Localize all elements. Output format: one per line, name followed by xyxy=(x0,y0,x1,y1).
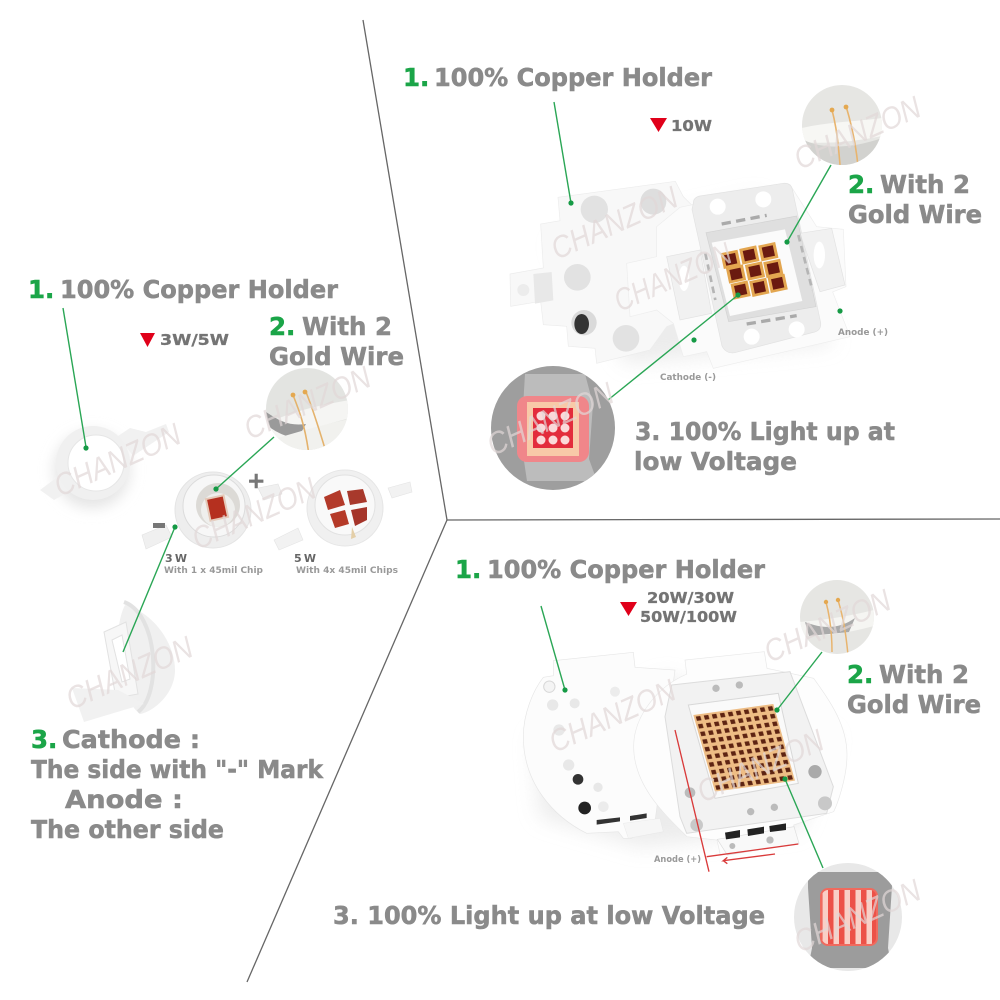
watermarks: CHANZON: CHANZON xyxy=(61,629,199,716)
text: with 2 gold wire: With 2 xyxy=(302,312,392,341)
watermarks: CHANZON: CHANZON xyxy=(187,471,322,556)
icon: 10W module xyxy=(510,181,850,368)
heading: copper holder: 100% Copper Holder xyxy=(487,555,766,584)
panel dividers xyxy=(247,20,1000,982)
text: 3W caption: With 1 x 45mil Chip xyxy=(164,566,264,576)
text: with 2 gold wire: Gold Wire xyxy=(269,342,404,371)
red polarity marks xyxy=(675,730,798,872)
text: with 2 gold wire: 2. xyxy=(847,660,873,689)
heading: copper holder: 100% Copper Holder xyxy=(60,275,339,304)
watermarks: CHANZON: CHANZON xyxy=(609,235,737,318)
heading: copper holder: 100% Copper Holder xyxy=(434,63,713,92)
front plate xyxy=(634,652,847,855)
chip array xyxy=(693,704,795,792)
text: cathode and anode notes: 3. xyxy=(31,725,57,754)
text: with 2 gold wire: 2. xyxy=(848,170,874,199)
watermarks: CHANZON: CHANZON xyxy=(789,872,927,959)
text: cathode and anode notes: The side with "-" Mark xyxy=(31,755,324,784)
watermarks: CHANZON: CHANZON xyxy=(789,89,927,176)
heading: copper holder: 1. xyxy=(403,63,429,92)
label: 20W to 100W xyxy=(620,589,737,626)
icon: lit red chip magnifier xyxy=(794,863,902,971)
icon: LED side view xyxy=(72,602,175,722)
watermarks: CHANZON xyxy=(49,89,927,959)
text: 3W caption xyxy=(164,552,264,576)
leader lines xyxy=(63,308,274,652)
icon: LED back view xyxy=(40,424,169,508)
text: light up at low voltage: 3. 100% Light up at low Voltage xyxy=(333,901,765,930)
icon: gold wire magnifier xyxy=(800,580,874,654)
text: with 2 gold wire xyxy=(848,170,982,229)
leader lines xyxy=(541,606,823,868)
text: cathode and anode notes: The other side xyxy=(31,815,224,844)
icon: 5W LED xyxy=(274,470,412,550)
text: with 2 gold wire: With 2 xyxy=(879,660,969,689)
label: anode: Anode (+) xyxy=(654,855,701,865)
text: with 2 gold wire: Gold Wire xyxy=(847,690,981,719)
back plate xyxy=(523,652,675,838)
heading: copper holder: 1. xyxy=(28,275,54,304)
icon: 3W LED xyxy=(142,472,282,549)
icon: gold wire magnifier xyxy=(266,368,348,450)
text: light up at low voltage: 3. 100% Light up at xyxy=(635,417,895,446)
label: 20W to 100W: 50W/100W xyxy=(640,608,737,626)
icon: lit red chip magnifier xyxy=(490,365,616,491)
panel: 20W-100W chip xyxy=(333,555,981,976)
text: with 2 gold wire: 2. xyxy=(269,312,295,341)
panel: 10W chip xyxy=(403,63,982,491)
text: with 2 gold wire xyxy=(269,312,404,371)
text: light up at low voltage: low Voltage xyxy=(634,447,797,476)
icon: gold wire magnifier xyxy=(800,84,884,168)
watermarks: CHANZON: CHANZON xyxy=(692,722,830,809)
watermarks: CHANZON: CHANZON xyxy=(759,582,897,669)
label: 20W to 100W: 20W/30W xyxy=(647,589,734,607)
label: cathode: Cathode (-) xyxy=(660,373,716,383)
label: 10W: 10W xyxy=(671,117,712,135)
text: cathode and anode notes: Cathode : xyxy=(62,725,200,754)
text: 5W caption: 5W xyxy=(294,552,316,565)
text: light up at low voltage xyxy=(634,417,895,476)
heading: copper holder: 1. xyxy=(455,555,481,584)
label: 10W xyxy=(650,117,712,135)
front plate xyxy=(627,183,850,368)
text: cathode and anode notes: Anode : xyxy=(65,785,183,814)
text: 5W caption xyxy=(294,552,398,576)
text: with 2 gold wire: With 2 xyxy=(880,170,970,199)
watermarks: CHANZON: CHANZON xyxy=(482,375,620,462)
text: with 2 gold wire: Gold Wire xyxy=(848,200,982,229)
watermarks: CHANZON: CHANZON xyxy=(239,359,377,446)
label: anode: Anode (+) xyxy=(838,328,888,338)
leader lines xyxy=(554,102,843,400)
text: with 2 gold wire xyxy=(847,660,981,719)
panel: 3W/5W LEDs xyxy=(28,275,412,844)
back plate xyxy=(510,181,697,363)
text: minus sign xyxy=(153,523,165,528)
text: 3W caption: 3W xyxy=(165,552,187,565)
text: 5W caption: With 4x 45mil Chips xyxy=(296,566,398,576)
text: plus sign: + xyxy=(247,469,265,494)
text: cathode and anode notes xyxy=(31,725,324,844)
chip array xyxy=(721,242,788,300)
label: 3W/5W: 3W/5W xyxy=(160,331,230,349)
label: 3W/5W xyxy=(140,331,230,349)
watermarks: CHANZON: CHANZON xyxy=(49,416,187,503)
icon: high-power module xyxy=(523,652,847,872)
watermarks: CHANZON: CHANZON xyxy=(544,672,682,759)
watermarks: CHANZON: CHANZON xyxy=(546,179,684,266)
